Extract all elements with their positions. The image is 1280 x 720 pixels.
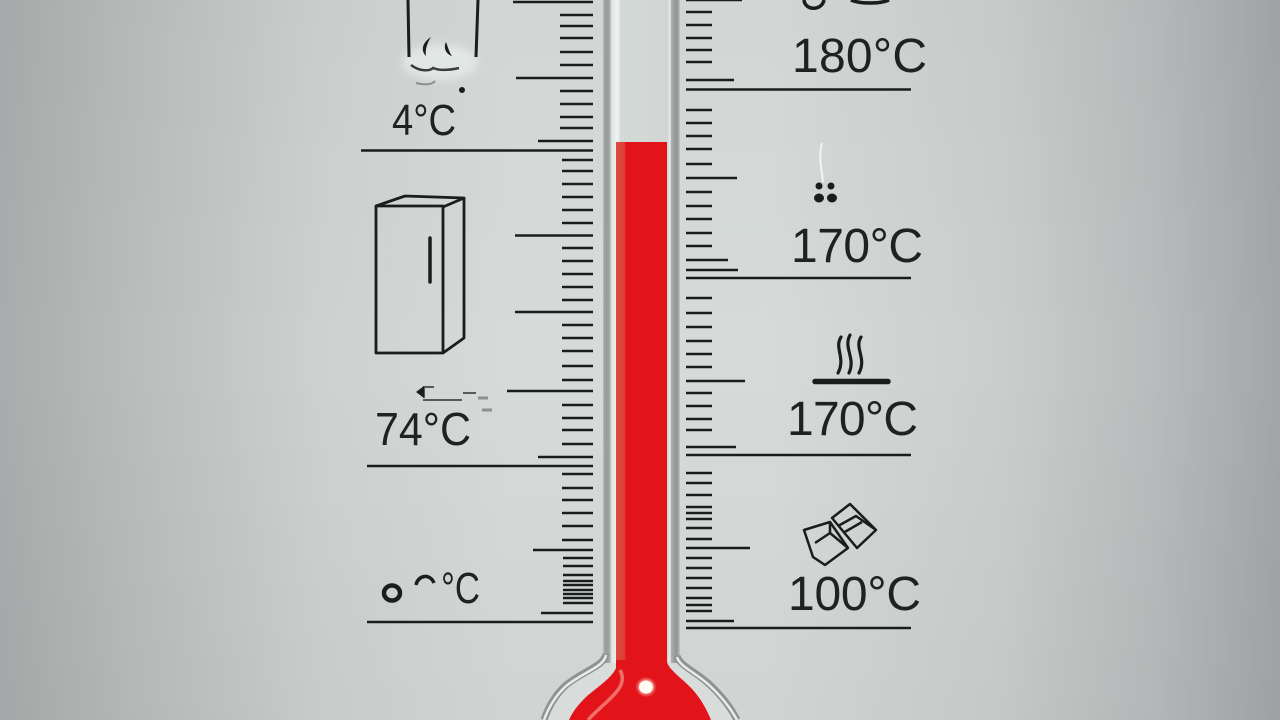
smudges: [402, 44, 478, 80]
glass bulb outline: [544, 654, 737, 720]
bulb highlight: [639, 680, 653, 694]
thermometer: [543, 0, 738, 720]
glass bulb highlight: [544, 655, 737, 720]
icon: small flame: [814, 143, 837, 202]
label: 74 degrees: 74°C: [375, 403, 471, 455]
icon: top right fragment: [804, 0, 889, 8]
red liquid column: [569, 142, 711, 720]
icon: ice cubes: [804, 504, 876, 565]
label: 180 degrees: 180°C: [792, 30, 927, 83]
bulb highlight glow: [637, 678, 655, 696]
label: 170 degrees upper: 170°C: [791, 220, 923, 273]
liquid reflection: [588, 670, 622, 720]
icon: heat waves over plate: [815, 335, 888, 382]
label: lower degrees: °C: [441, 564, 480, 613]
icon: garbled fragment above 74 degrees: [416, 386, 492, 410]
icon: refrigerator: [376, 196, 464, 353]
icon: garbled glyph before lower label: [384, 576, 434, 600]
label: 4 degrees: 4°C: [392, 96, 456, 145]
glass tube: [603, 0, 680, 663]
label: 170 degrees lower: 170°C: [787, 393, 918, 446]
bulb glass interior: [543, 652, 738, 720]
left scale ticks: [361, 2, 593, 622]
label: 100 degrees: 100°C: [788, 568, 921, 621]
right scale ticks: [686, 0, 911, 628]
icon: glass with steam: [402, 0, 478, 93]
